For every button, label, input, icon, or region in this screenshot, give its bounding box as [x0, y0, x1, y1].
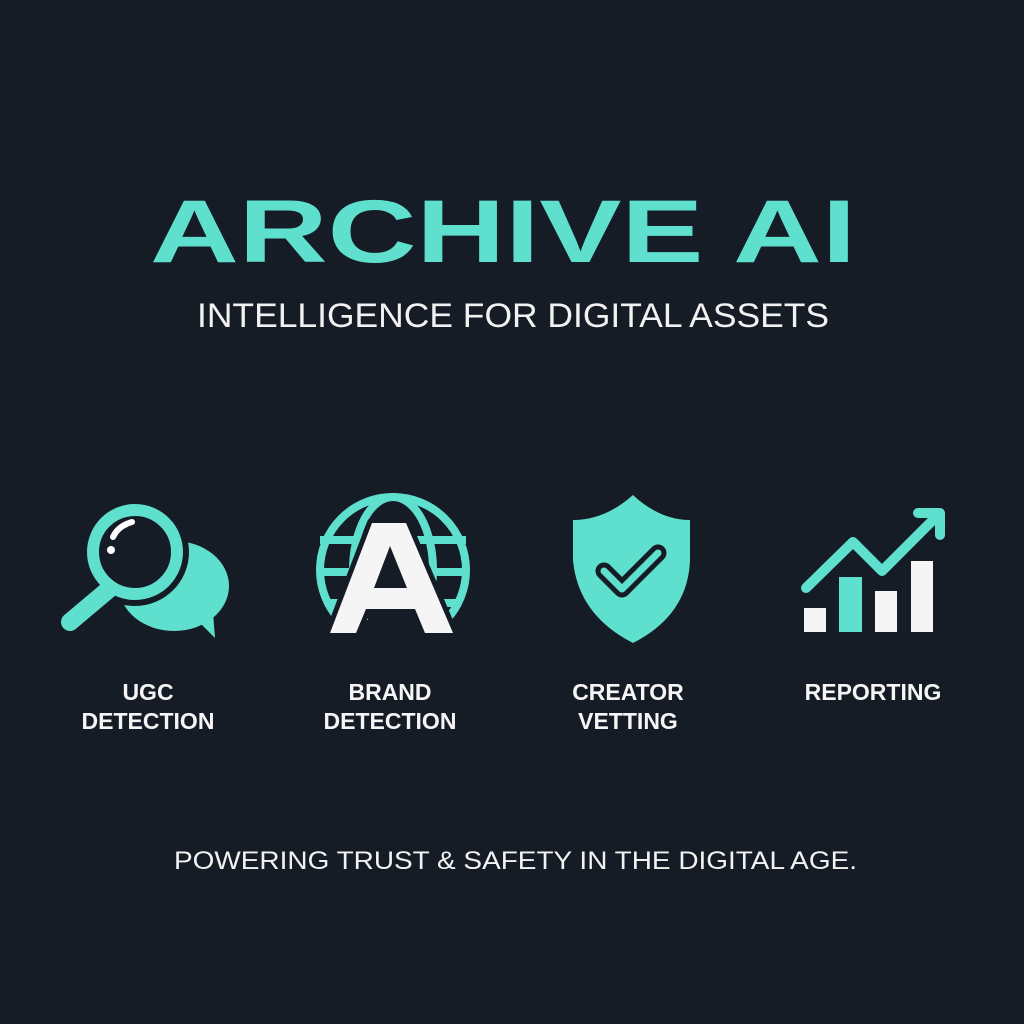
label: reporting: REPORTING: [805, 679, 941, 705]
title: ARCHIVE AI: [150, 181, 856, 281]
icon: globe with A: [318, 497, 468, 643]
icon: shield with check: [573, 495, 690, 643]
label: UGC detection: DETECTION: [82, 708, 214, 734]
label: creator vetting: CREATOR: [572, 679, 684, 705]
footer tagline: POWERING TRUST & SAFETY IN THE DIGITAL AGE.: [174, 847, 857, 875]
icon: growth chart: [804, 513, 940, 632]
label: UGC detection: [82, 679, 214, 734]
label: creator vetting: VETTING: [578, 708, 678, 734]
label: brand detection: BRAND: [348, 679, 432, 705]
label: brand detection: DETECTION: [324, 708, 456, 734]
label: UGC detection: UGC: [122, 679, 174, 705]
label: creator vetting: [572, 679, 684, 734]
subtitle: INTELLIGENCE FOR DIGITAL ASSETS: [197, 297, 829, 335]
label: brand detection: [324, 679, 456, 734]
icon: magnifier with chat bubble: [70, 498, 229, 638]
